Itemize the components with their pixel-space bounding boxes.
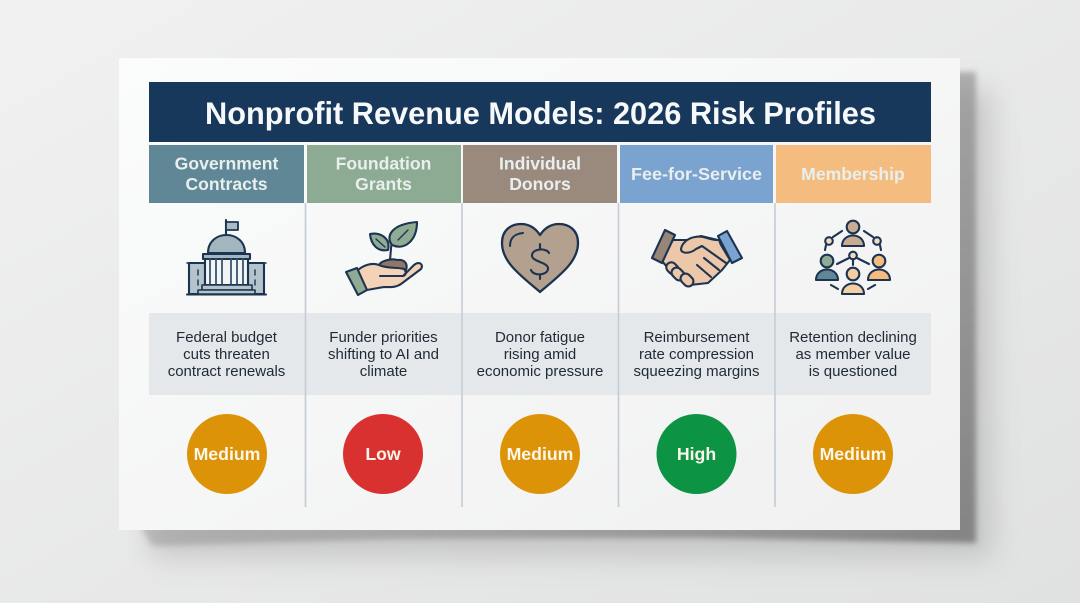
icon: hand holding seedling xyxy=(346,222,422,295)
column header: Individual Donors: Individual xyxy=(499,154,581,174)
risk badge: High: High xyxy=(677,444,716,464)
challenge text: Fee-for-Service: squeezing margins xyxy=(634,363,759,380)
risk badge: Low: Low xyxy=(365,444,401,464)
column header: Government Contracts xyxy=(149,145,304,203)
challenge text: Foundation Grants xyxy=(328,329,439,380)
icon: handshake xyxy=(652,230,742,288)
column header: Fee-for-Service xyxy=(620,145,773,203)
icon: government building xyxy=(187,220,266,294)
challenge text: Fee-for-Service: Reimbursement xyxy=(644,329,750,346)
icon: heart with dollar sign xyxy=(502,224,578,292)
challenge text band background xyxy=(149,313,931,395)
challenge text: Membership xyxy=(789,329,917,380)
icon: member network xyxy=(816,221,890,294)
risk badge: Medium xyxy=(813,414,893,494)
title: Nonprofit Revenue Models: 2026 Risk Profiles xyxy=(205,95,876,131)
column header: Government Contracts: Contracts xyxy=(185,174,268,194)
challenge text: Membership: Retention declining xyxy=(789,329,917,346)
risk badge: Medium xyxy=(187,414,267,494)
title banner xyxy=(149,82,931,142)
risk badge: Medium: Medium xyxy=(820,444,886,464)
challenge text: Membership: as member value xyxy=(795,346,911,363)
challenge text: Individual Donors: Donor fatigue xyxy=(495,329,585,346)
column header: Individual Donors: Donors xyxy=(509,174,571,194)
column header: Government Contracts: Government xyxy=(175,154,278,174)
challenge text: Foundation Grants: climate xyxy=(360,363,407,380)
challenge text: Individual Donors: rising amid xyxy=(504,346,576,363)
risk badge: Medium: Medium xyxy=(194,444,260,464)
challenge text: Fee-for-Service xyxy=(634,329,759,380)
risk badge: Medium: Medium xyxy=(507,444,573,464)
challenge text: Foundation Grants: Funder priorities xyxy=(329,329,438,346)
challenge text: Foundation Grants: shifting to AI and xyxy=(328,346,439,363)
challenge text: Individual Donors: economic pressure xyxy=(477,363,603,380)
challenge text: Government Contracts: cuts threaten xyxy=(183,346,270,363)
challenge text: Individual Donors xyxy=(477,329,603,380)
challenge text: Fee-for-Service: rate compression xyxy=(639,346,754,363)
paper card xyxy=(119,58,960,530)
column dividers xyxy=(306,203,775,507)
paper shadow xyxy=(140,72,992,558)
risk badge: Low xyxy=(343,414,423,494)
column header: Membership: Membership xyxy=(801,164,905,184)
risk badge: Medium xyxy=(500,414,580,494)
column header: Foundation Grants xyxy=(307,145,461,203)
challenge text: Membership: is questioned xyxy=(809,363,897,380)
challenge text: Government Contracts: Federal budget xyxy=(176,329,278,346)
challenge text: Government Contracts: contract renewals xyxy=(168,363,285,380)
column header: Individual Donors xyxy=(463,145,617,203)
column header: Foundation Grants: Grants xyxy=(355,174,412,194)
column header: Foundation Grants: Foundation xyxy=(336,154,431,174)
column header: Membership xyxy=(776,145,931,203)
risk badge: High xyxy=(656,414,736,494)
challenge text: Government Contracts xyxy=(168,329,285,380)
column header: Fee-for-Service: Fee-for-Service xyxy=(631,164,762,184)
